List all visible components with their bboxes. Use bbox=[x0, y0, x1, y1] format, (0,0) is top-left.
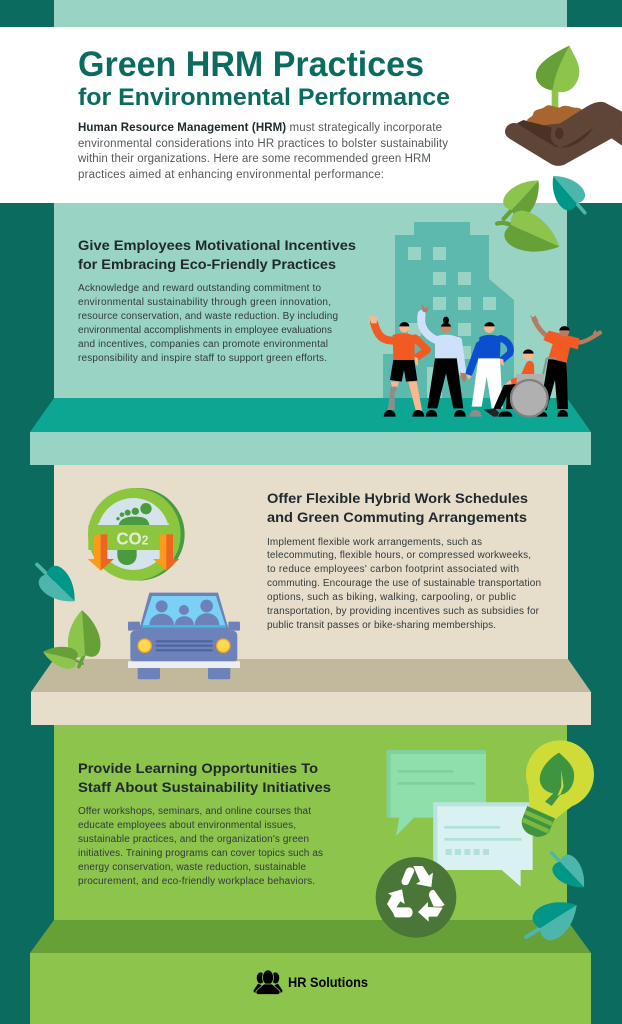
heading: section 1 bbox=[78, 237, 356, 272]
icon: teal leaf section 3 upper bbox=[542, 844, 594, 896]
intro text: Human Resource Management (HRM) must strategically incorporate bbox=[78, 122, 442, 134]
body text: section 3: sustainable practices, and the organization's green bbox=[78, 834, 309, 845]
icon: green leaf section 2 bbox=[66, 609, 102, 667]
body text: section 3: energy conservation, waste reduction, sustainable bbox=[78, 862, 306, 873]
icon: teal leaf section 2 bbox=[27, 554, 85, 612]
panel: section 2 background bbox=[54, 465, 568, 725]
intro text bbox=[77, 122, 448, 181]
illustration: hands holding sprout bbox=[505, 46, 622, 166]
icon: falling teal leaf bbox=[543, 167, 596, 222]
body text: section 2: public transit passes or bike-sharing memberships. bbox=[267, 620, 496, 631]
icon: CO2 footprint badge bbox=[88, 488, 185, 581]
platform: section 1 bbox=[30, 398, 591, 465]
heading: section 3: Staff About Sustainability Initiatives bbox=[78, 779, 331, 795]
icon: small green leaf section 2 bbox=[40, 642, 86, 672]
icon: CO2 footprint badge: CO2 bbox=[116, 529, 148, 549]
intro text: environmental considerations into HR practices to bolster sustainability bbox=[78, 138, 448, 150]
platform: section 3 bbox=[30, 920, 591, 1024]
body text: section 2 bbox=[267, 537, 541, 631]
body text: section 1: resource conservation, and waste reduction. By including bbox=[78, 311, 338, 322]
intro text: within their organizations. Here are some recommended green HRM bbox=[77, 153, 431, 165]
body text: section 3: educate employees about environmental issues, bbox=[78, 820, 296, 831]
body text: section 1: environmental accomplishments in employee evaluations bbox=[78, 325, 332, 336]
heading: section 2 bbox=[267, 490, 528, 525]
body text: section 1: Acknowledge and reward outstanding commitment to bbox=[78, 283, 321, 294]
body text: section 2: telecommuting, flexible hours, or compressed workweeks, bbox=[267, 550, 531, 561]
heading: section 3: Provide Learning Opportunities To bbox=[78, 760, 318, 776]
person 1 with prosthetic leg bbox=[369, 313, 427, 417]
icon: people silhouettes bbox=[253, 970, 283, 994]
body text: section 2: options, such as biking, walking, carpooling, or public bbox=[267, 592, 516, 603]
icon: falling green leaf bbox=[493, 170, 550, 229]
body text: section 2: to reduce employees' carbon footprint associated with bbox=[267, 564, 519, 575]
speech bubble blue bbox=[433, 802, 533, 887]
icon: falling wide leaf bbox=[491, 202, 567, 264]
illustration: car with passengers bbox=[128, 593, 240, 679]
panel: section 1 background bbox=[54, 203, 567, 465]
body text: section 1: and incentives, companies can promote environmental bbox=[78, 339, 328, 350]
heading: section 1: for Embracing Eco-Friendly Practices bbox=[78, 256, 336, 272]
footer logo bbox=[253, 970, 368, 994]
illustration: learning speech bubbles bbox=[376, 740, 594, 938]
body text: section 1: responsibility and inspire staff to support green efforts. bbox=[78, 353, 327, 364]
person 2 waving bbox=[421, 303, 467, 417]
icon: recycling symbol bbox=[376, 857, 456, 938]
top band bbox=[54, 0, 567, 27]
body text: section 2: transportation, by providing incentives such as subsidies for bbox=[267, 606, 540, 617]
body text: section 3: initiatives. Training programs can cover topics such as bbox=[78, 848, 323, 859]
icon: eco light bulb bbox=[522, 740, 594, 837]
footer logo: HR Solutions bbox=[288, 975, 368, 990]
speech bubble green bbox=[387, 750, 486, 836]
body text: section 2: Implement flexible work arrangements, such as bbox=[267, 537, 482, 548]
person 5 arms raised bbox=[530, 315, 602, 417]
person 4 in wheelchair bbox=[483, 349, 557, 417]
body text: section 1 bbox=[78, 283, 338, 364]
header panel bbox=[0, 27, 622, 203]
person 3 in blue bbox=[466, 322, 511, 417]
subtitle: for Environmental Performance bbox=[78, 84, 450, 111]
heading: section 3 bbox=[78, 760, 331, 795]
heading: section 2: Offer Flexible Hybrid Work Schedules bbox=[267, 490, 528, 506]
body text: section 3: Offer workshops, seminars, and online courses that bbox=[78, 806, 311, 817]
illustration: office building bbox=[383, 222, 514, 398]
body text: section 3: procurement, and eco-friendly workplace behaviors. bbox=[78, 876, 315, 887]
title: Green HRM Practices bbox=[78, 45, 424, 84]
intro text: practices aimed at enhancing environmental performance: bbox=[78, 169, 384, 181]
body text: section 2: commuting. Encourage the use of sustainable transportation bbox=[267, 578, 541, 589]
panel: section 3 background bbox=[54, 725, 567, 925]
illustration: group of diverse employees bbox=[369, 303, 602, 417]
heading: section 1: Give Employees Motivational Incentives bbox=[78, 237, 356, 253]
icon: teal leaf section 3 lower bbox=[517, 890, 586, 952]
platform: section 2 bbox=[31, 659, 591, 725]
body text: section 1: environmental sustainability through green innovation, bbox=[78, 297, 331, 308]
heading: section 2: and Green Commuting Arrangements bbox=[267, 509, 527, 525]
body text: section 3 bbox=[78, 806, 323, 887]
